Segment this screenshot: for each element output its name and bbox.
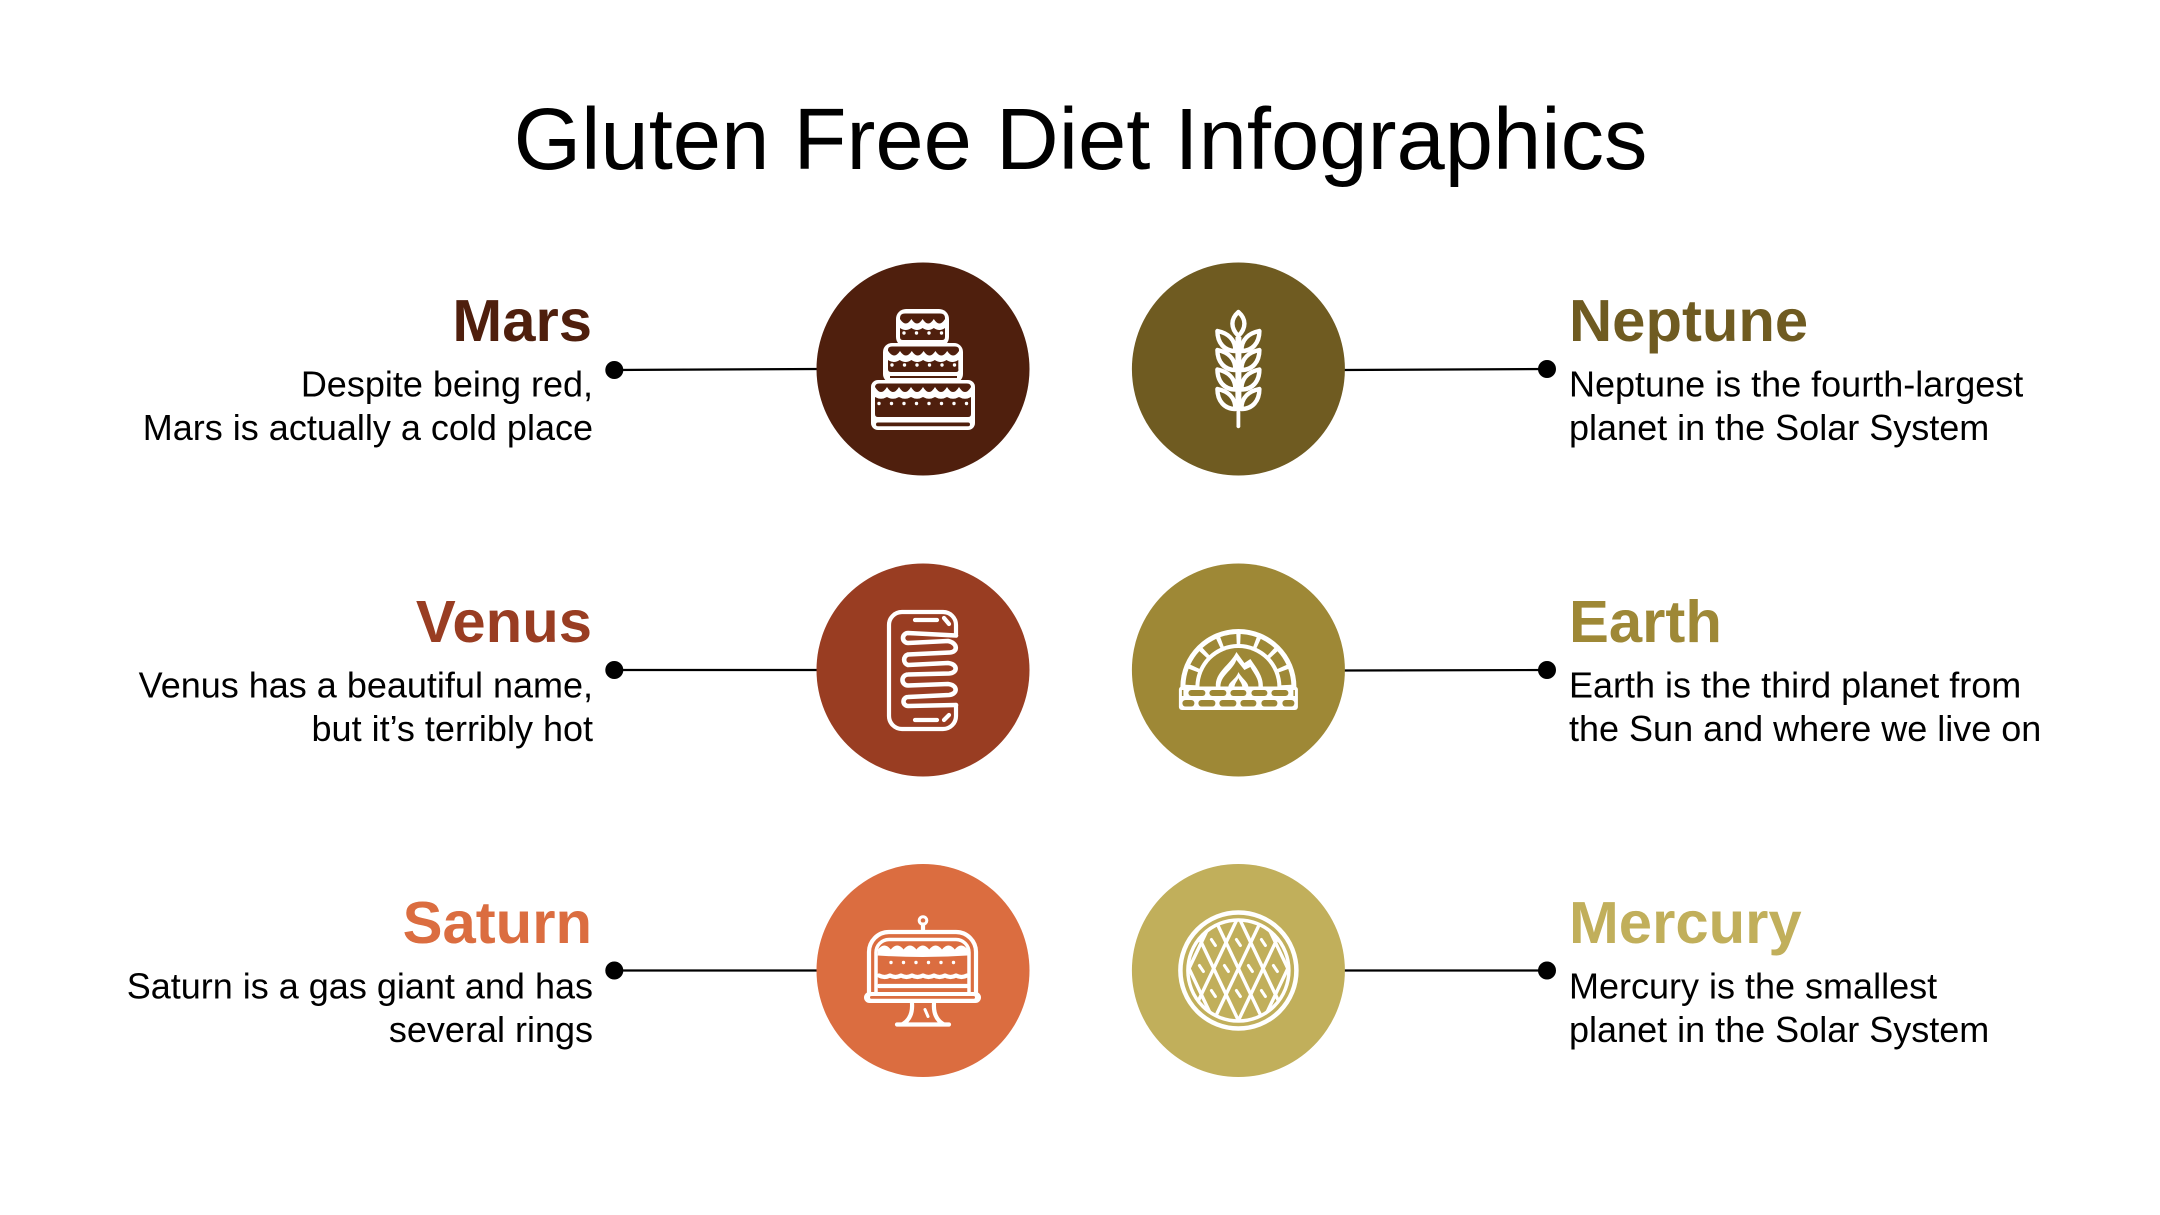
panel: Mars xyxy=(143,262,1030,476)
text: Mars description: Despite being red, xyxy=(301,364,593,404)
text: Mercury description: planet in the Solar System xyxy=(1569,1009,1989,1050)
text: Earth description: Earth is the third planet from xyxy=(1569,664,2021,706)
heading: Saturn: Saturn xyxy=(403,889,592,956)
text: Mars description: Mars is actually a cold place xyxy=(143,407,593,448)
connector: Mercury xyxy=(1342,962,1556,980)
connector: Mars xyxy=(605,361,820,379)
icon: ribs xyxy=(816,564,1030,776)
heading: Neptune: Neptune xyxy=(1569,287,1808,354)
heading: Mars: Mars xyxy=(452,287,592,354)
panel: Saturn xyxy=(127,864,1030,1077)
text: Earth description: the Sun and where we live on xyxy=(1569,708,2041,749)
heading: Mercury: Mercury xyxy=(1569,889,1802,956)
connector: Earth xyxy=(1342,661,1556,679)
panel: Earth xyxy=(1132,564,2041,776)
text: Venus description: but it’s terribly hot xyxy=(312,708,593,749)
icon: brick oven xyxy=(1132,564,1345,776)
connector: Venus xyxy=(605,661,820,679)
text: Venus description: Venus has a beautiful name, xyxy=(139,664,593,706)
text: Neptune description: planet in the Solar System xyxy=(1569,407,1989,448)
title: Gluten Free Diet Infographics xyxy=(514,91,1647,188)
text: Saturn description: Saturn is a gas giant and has xyxy=(127,966,593,1006)
heading: Venus: Venus xyxy=(416,588,592,655)
panel: Mercury xyxy=(1110,864,1989,1077)
connector: Saturn xyxy=(605,962,820,980)
icon: cake stand xyxy=(816,864,1030,1077)
panel: Venus xyxy=(139,564,1030,776)
text: Mercury description: Mercury is the smallest xyxy=(1569,966,1937,1006)
heading: Earth: Earth xyxy=(1569,588,1722,655)
panel: Neptune xyxy=(1132,262,2023,476)
connector: Neptune xyxy=(1342,360,1556,378)
icon: layered cake xyxy=(816,262,1030,476)
icon: lattice pie xyxy=(1132,864,1345,1077)
icon: wheat xyxy=(1132,262,1345,476)
text: Saturn description: several rings xyxy=(389,1009,593,1050)
text: Neptune description: Neptune is the fourth-largest xyxy=(1569,364,2023,404)
